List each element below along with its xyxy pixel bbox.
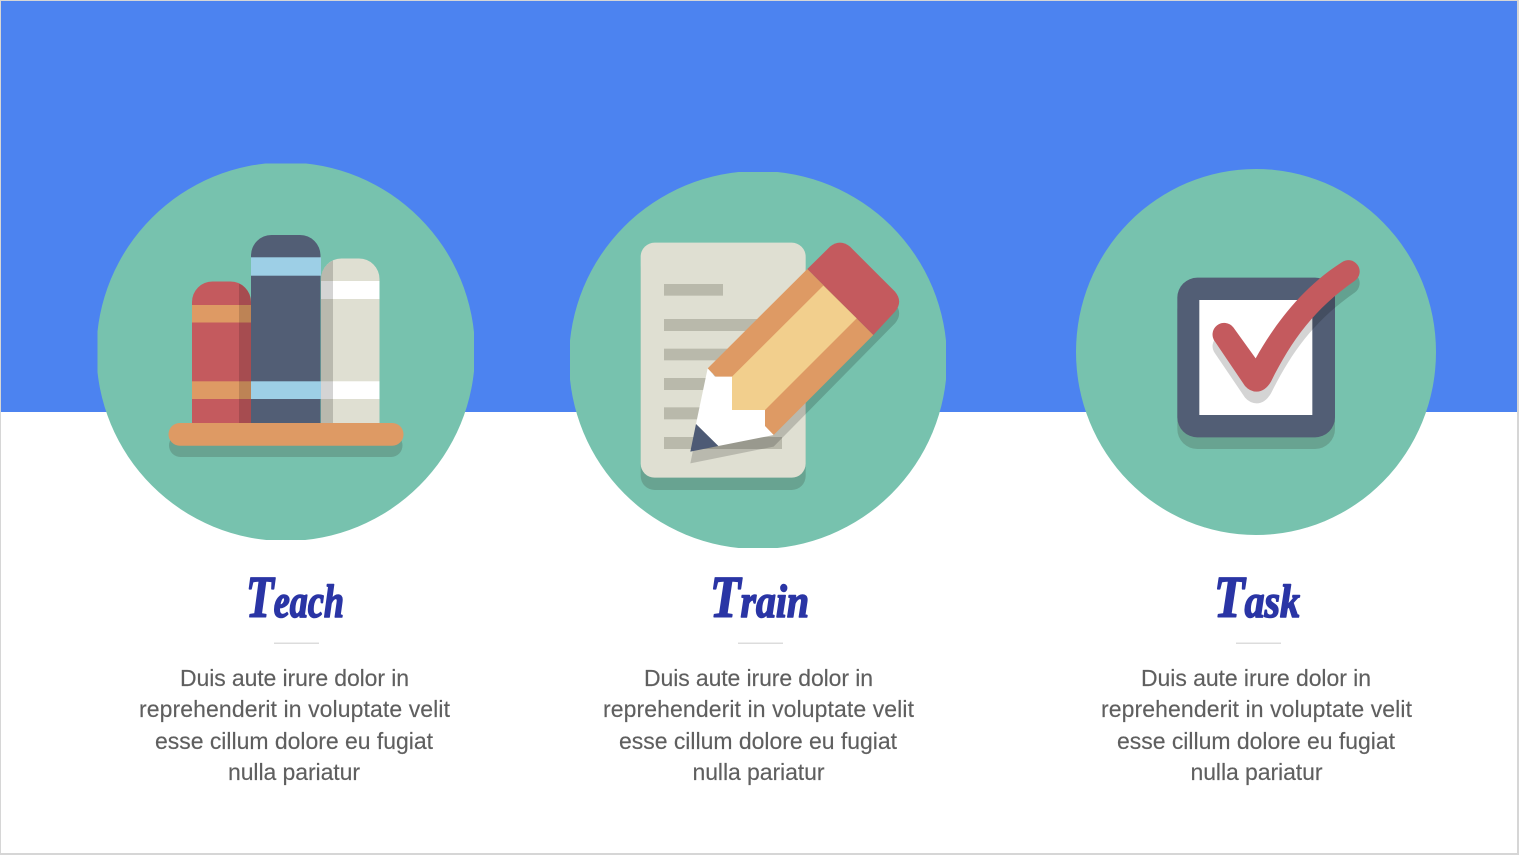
text block: task description: reprehenderit in voluptate velit (1101, 696, 1413, 722)
text block: teach description: nulla pariatur (228, 759, 360, 785)
text block: task description: nulla pariatur (1190, 759, 1323, 785)
text block: train description: reprehenderit in voluptate velit (603, 696, 915, 722)
text block: task description: Duis aute irure dolor in (1141, 665, 1371, 691)
task circle (1076, 169, 1436, 535)
text block: train description: nulla pariatur (692, 759, 825, 785)
blue header band (1, 1, 1517, 412)
teach circle (96, 162, 475, 541)
icon: books on a shelf (168, 235, 404, 457)
heading: Train: Train (710, 564, 809, 630)
text block: teach description: Duis aute irure dolor in (180, 665, 409, 691)
text block: task description: esse cillum dolore eu fugiat (1117, 728, 1396, 754)
icon: checked box (1177, 260, 1360, 449)
text block: train description: Duis aute irure dolor in (644, 665, 873, 691)
panel: teach (96, 162, 475, 785)
text block: teach description: esse cillum dolore eu fugiat (155, 728, 434, 754)
text block: teach description (139, 665, 451, 785)
panel: train (569, 171, 947, 785)
text block: train description: esse cillum dolore eu fugiat (619, 728, 898, 754)
text block: teach description: reprehenderit in voluptate velit (139, 696, 451, 722)
icon: paper and pencil (641, 243, 899, 490)
train circle (569, 171, 947, 549)
text block: train description (603, 665, 915, 785)
text block: task description (1101, 665, 1413, 785)
heading: Task: Task (1214, 564, 1300, 630)
panel: task (1076, 169, 1436, 785)
heading: Teach: Teach (246, 564, 344, 630)
